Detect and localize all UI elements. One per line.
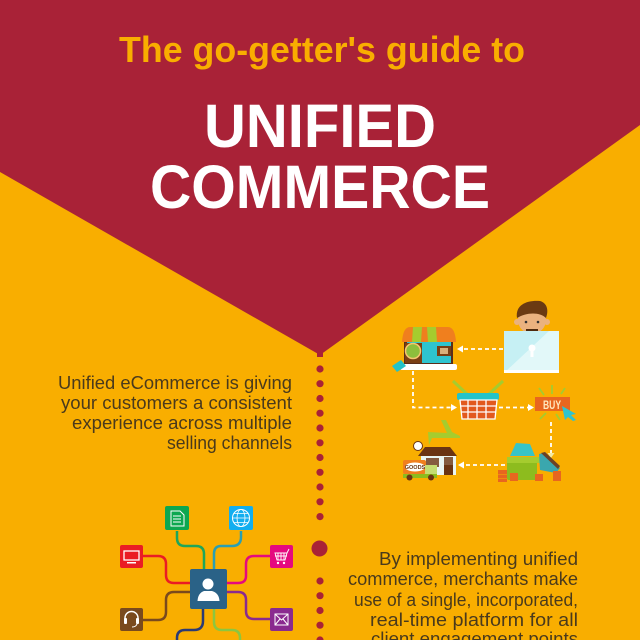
diagram: channels network bbox=[120, 506, 293, 640]
text block: unified eCommerce definition: your customers a consistent bbox=[61, 393, 292, 413]
icon: house, truck and plane delivery: GOODS bbox=[405, 465, 426, 471]
icon: shopping basket bbox=[453, 381, 503, 419]
icon: envelope bbox=[270, 608, 293, 631]
flow arrows bbox=[413, 349, 551, 465]
title: go-getter's guide: The go-getter's guide to bbox=[119, 29, 525, 70]
heading: unified commerce bbox=[150, 92, 490, 221]
text block: implementing unified commerce: By implementing unified bbox=[379, 549, 578, 569]
icon: central user bbox=[190, 569, 227, 609]
connector lines bbox=[142, 531, 271, 640]
icon: buy button with cursor bbox=[535, 385, 576, 421]
text block: implementing unified commerce: commerce, merchants make bbox=[348, 569, 578, 589]
icon: wallet with cash and cards bbox=[498, 443, 561, 482]
text block: implementing unified commerce: use of a single, incorporated, bbox=[354, 590, 578, 610]
icon: buy button with cursor: BUY bbox=[543, 400, 561, 412]
text block: unified eCommerce definition: experience across multiple bbox=[72, 413, 292, 433]
text block: implementing unified commerce: real-time platform for all bbox=[370, 610, 578, 630]
icon: online storefront laptop bbox=[392, 327, 457, 372]
heading: unified commerce: COMMERCE bbox=[150, 153, 490, 221]
icon: headset support bbox=[120, 608, 143, 631]
diagram: shopping flow bbox=[392, 301, 576, 482]
text block: unified eCommerce definition bbox=[58, 373, 292, 453]
heading: unified commerce: UNIFIED bbox=[204, 92, 436, 160]
dotted timeline bbox=[312, 350, 328, 640]
text block: unified eCommerce definition: Unified eCommerce is giving bbox=[58, 373, 292, 393]
red header banner bbox=[0, 0, 640, 355]
icon: document bbox=[165, 506, 189, 530]
icon: globe bbox=[229, 506, 253, 530]
icon: monitor bbox=[120, 545, 143, 568]
text block: unified eCommerce definition: selling channels bbox=[167, 433, 292, 453]
icon: house, truck and plane delivery bbox=[403, 420, 460, 480]
icon: man with laptop bbox=[504, 301, 559, 373]
icon: shopping cart bbox=[270, 545, 293, 568]
text block: implementing unified commerce bbox=[348, 549, 578, 640]
